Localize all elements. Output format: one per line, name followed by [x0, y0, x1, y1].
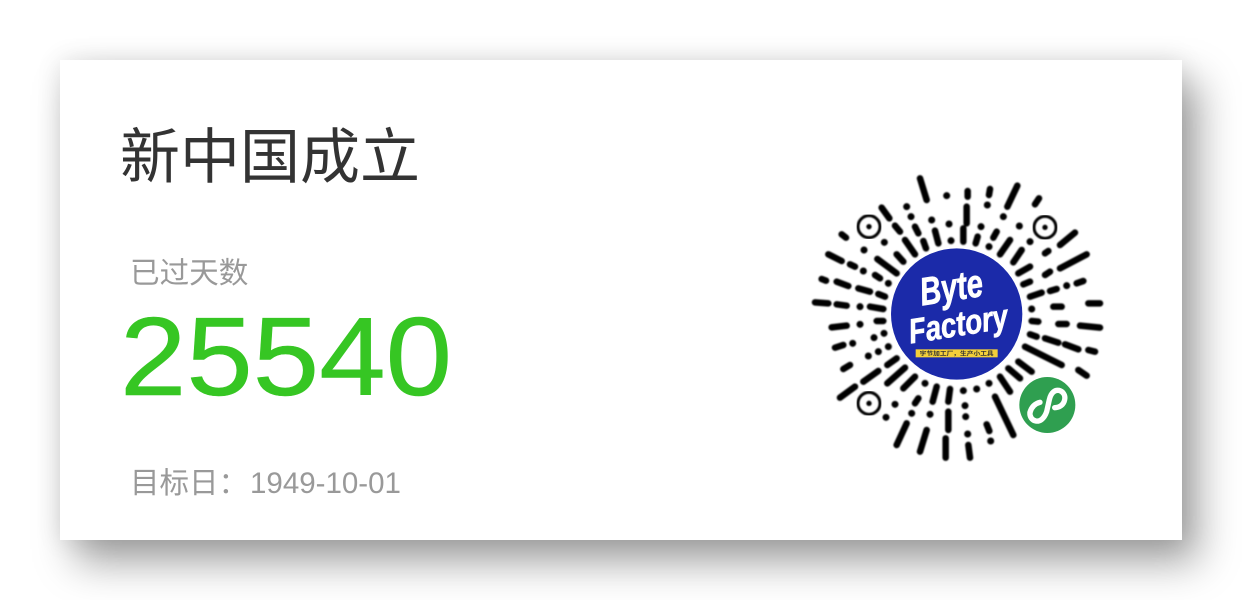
- icon: finder ring top right: [1034, 216, 1056, 238]
- icon: finder ring bottom left: [858, 392, 880, 414]
- Byte Factory logo: [891, 248, 1022, 380]
- label: days passed: 已过天数: [130, 257, 248, 290]
- logo word: Byte: Byte: [917, 261, 986, 315]
- big number: days count: 25540: [120, 296, 452, 419]
- target date: 目标日：1949-10-01: [130, 467, 401, 500]
- logo word: Factory: Factory: [906, 298, 1012, 351]
- title: 新中国成立: [120, 124, 420, 191]
- QR code strokes: [815, 178, 1100, 458]
- mini program QR code: [810, 174, 1104, 462]
- card panel: [60, 60, 1182, 540]
- icon: finder ring top left: [858, 216, 880, 238]
- icon: mini program badge: [1019, 377, 1075, 433]
- yellow tagline bar: 字节加工厂，生产小工具: [920, 349, 994, 357]
